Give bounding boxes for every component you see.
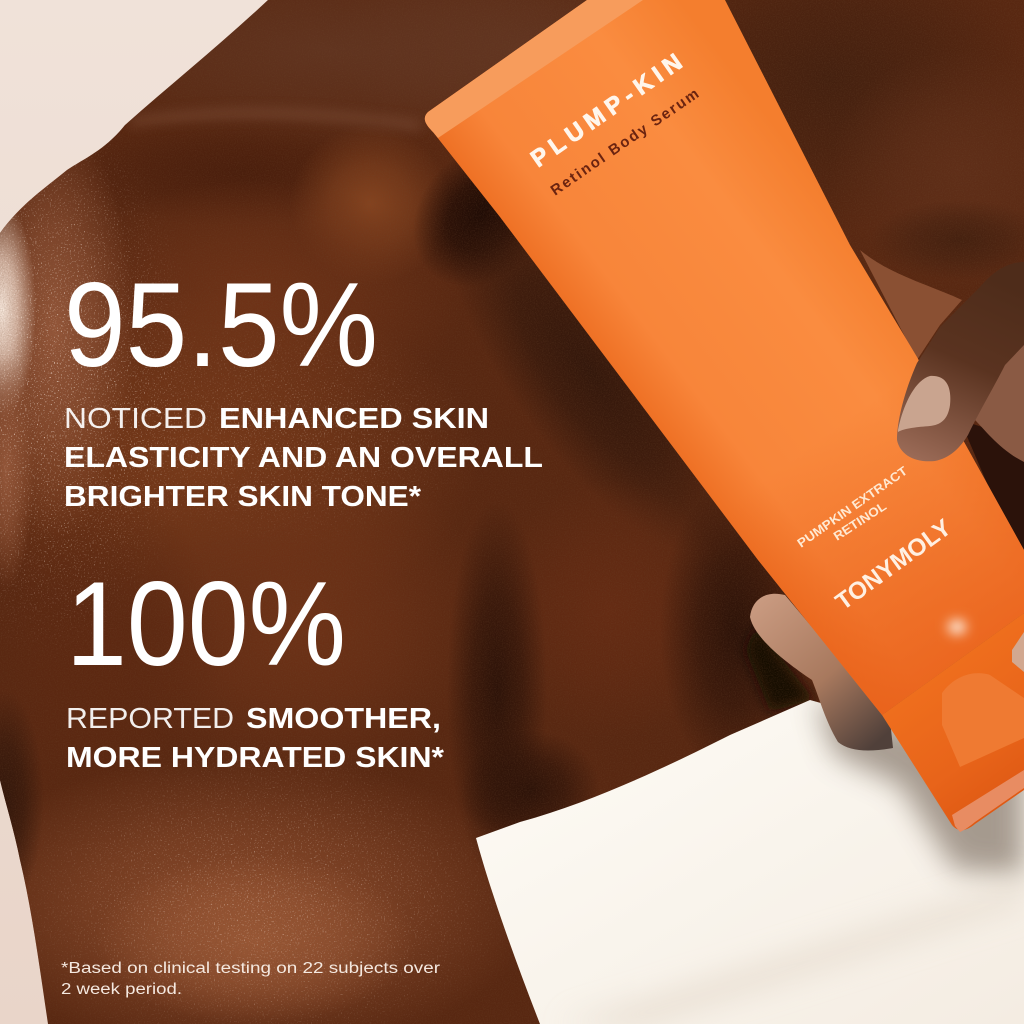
second finger bbox=[975, 340, 1024, 462]
stat 2 description: MORE HYDRATED SKIN* bbox=[66, 742, 445, 774]
stat 1 description bbox=[64, 403, 543, 513]
brand: TONYMOLY bbox=[831, 514, 957, 616]
stat 2 description: REPORTED bbox=[66, 703, 234, 735]
tan hand behind tube bbox=[860, 250, 962, 360]
stat 1 description: ELASTICITY AND AN OVERALL bbox=[64, 442, 543, 474]
tube body bbox=[425, 0, 1024, 715]
stat 100%: 100% bbox=[66, 557, 346, 691]
footnote bbox=[61, 960, 440, 998]
stat 95.5%: 95.5% bbox=[64, 258, 378, 392]
ingredient line 1: PUMPKIN EXTRACT bbox=[795, 464, 910, 550]
thumb nail bbox=[898, 376, 950, 432]
dark gap right of tube bbox=[960, 420, 1024, 570]
stat 1 description: ENHANCED SKIN bbox=[219, 403, 489, 435]
finger tip on cap bbox=[1012, 632, 1024, 672]
product subtitle: Retinol Body Serum bbox=[548, 85, 702, 199]
stat 1 description: NOTICED bbox=[64, 403, 207, 435]
ingredient line 2: RETINOL bbox=[831, 499, 889, 544]
white garment bbox=[476, 700, 1024, 1024]
thumb bbox=[897, 262, 1024, 461]
stat 1 description: BRIGHTER SKIN TONE* bbox=[64, 481, 422, 513]
cap body bbox=[882, 613, 1024, 830]
tube shoulder shading bbox=[425, 0, 1024, 715]
cap notch bbox=[942, 673, 1024, 767]
specular spot bbox=[948, 620, 966, 634]
lower finger bbox=[750, 594, 893, 750]
stat 2 description bbox=[66, 703, 445, 774]
upper hand bbox=[897, 262, 1024, 672]
footnote: 2 week period. bbox=[61, 981, 182, 998]
tube bbox=[425, 0, 1024, 832]
cap lip bbox=[952, 770, 1024, 832]
stat 2 description: SMOOTHER, bbox=[246, 703, 441, 735]
tube crimp bbox=[425, 0, 643, 138]
footnote: *Based on clinical testing on 22 subjects over bbox=[61, 960, 440, 977]
product name: PLUMP-KIN bbox=[526, 49, 687, 173]
